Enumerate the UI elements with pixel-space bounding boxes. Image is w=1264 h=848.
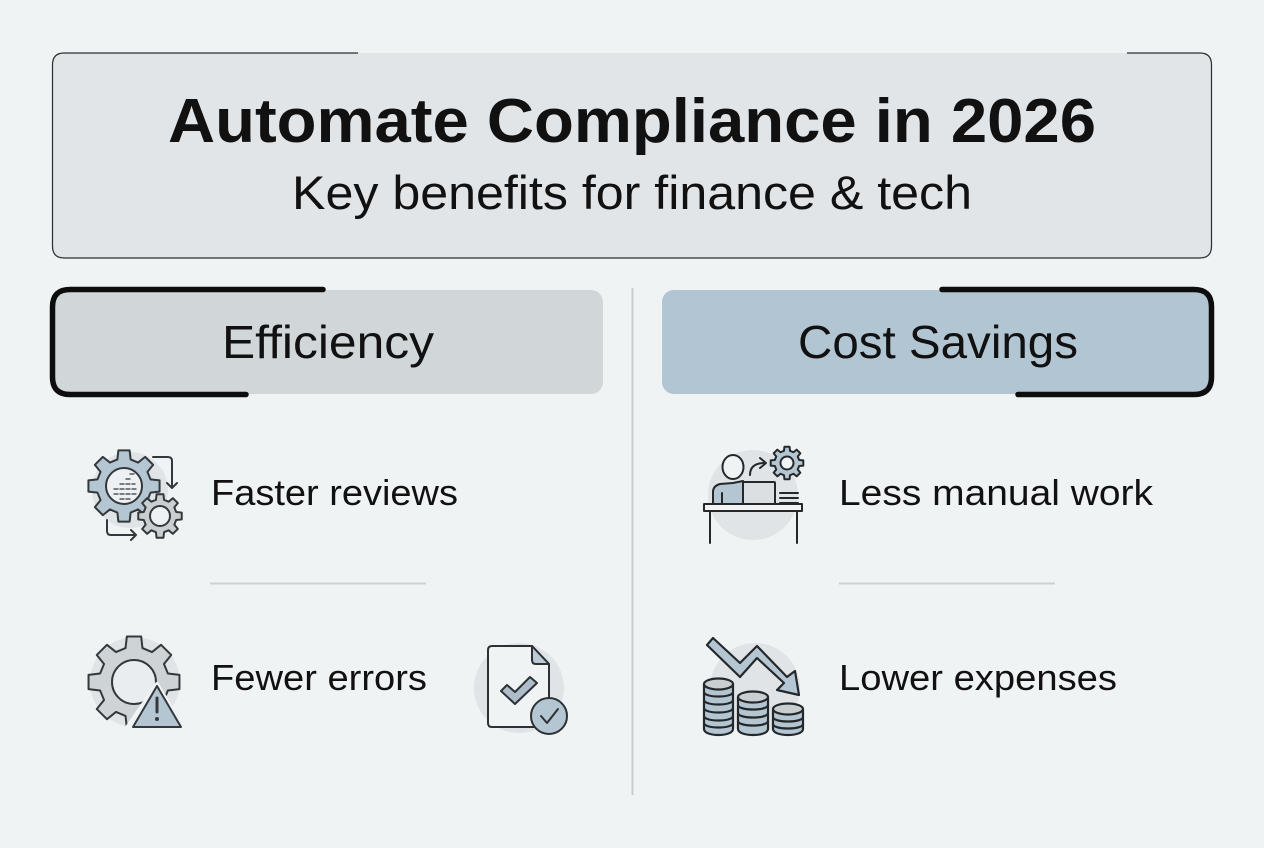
coin stack: short	[773, 704, 803, 735]
title banner	[52, 53, 1212, 258]
icon: document with check	[474, 643, 567, 734]
column divider	[632, 288, 634, 795]
icon: gear with warning triangle	[89, 637, 186, 732]
title: Automate Compliance in 2026	[168, 87, 1096, 156]
icon: gears with process arrows	[88, 450, 182, 540]
coin stack: tall	[704, 678, 733, 735]
item: faster reviews: Faster reviews	[211, 472, 458, 513]
heading: cost savings: Cost Savings	[798, 316, 1078, 368]
heading: efficiency: Efficiency	[222, 316, 434, 368]
item: fewer errors: Fewer errors	[211, 657, 427, 698]
icon: falling arrow over coin stacks	[704, 638, 803, 735]
item: lower expenses: Lower expenses	[839, 657, 1117, 698]
panel: cost savings header	[662, 290, 1212, 394]
panel: efficiency header	[52, 290, 603, 394]
icon: person at desk with gear	[704, 447, 803, 543]
subtitle: Key benefits for finance & tech	[292, 166, 972, 219]
coin stack: medium	[738, 692, 768, 735]
item: less manual work: Less manual work	[839, 472, 1154, 513]
divider	[839, 582, 1055, 584]
divider	[210, 582, 426, 584]
